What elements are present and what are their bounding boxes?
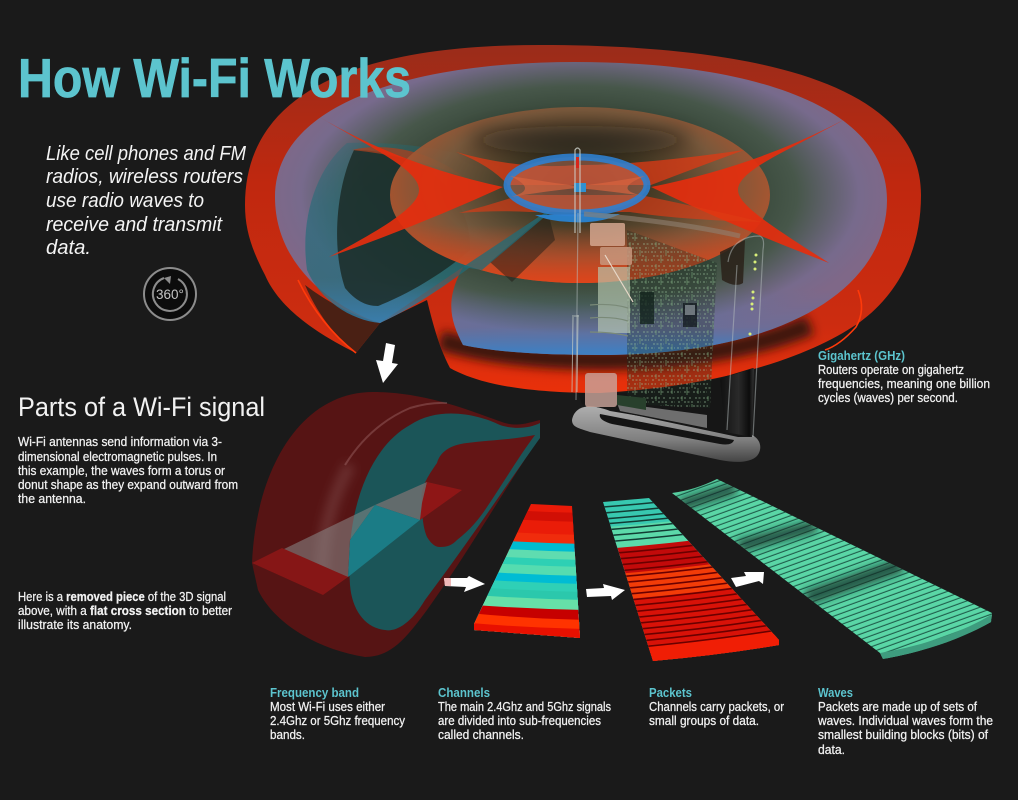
text: antennas description: donut shape as they expand outward from [18,478,238,492]
piece inner red hole [422,435,535,547]
red arc above hollow [352,147,465,178]
intro text: Like cell phones and FM [46,143,246,165]
band: frequency band [474,504,580,638]
inner bow tie [510,176,645,197]
piece inner glow [322,465,350,575]
chip two label [685,305,695,315]
arrow: packets to waves [731,572,764,587]
removed piece of signal [252,392,540,657]
text: removed piece description [18,590,232,632]
middle purple-blue shell [275,62,887,355]
main antenna [575,148,580,233]
piece teal cross section [349,413,540,630]
chip two [683,303,697,327]
section heading: Parts of a Wi-Fi signal [18,392,265,422]
status LEDs [748,254,758,336]
chip one [640,292,654,324]
teal cross-section of cut [305,143,552,323]
module contour lines [590,304,628,336]
antenna tip [576,157,579,168]
grey inner band [617,403,707,428]
caption: packets: Channels carry packets, or [649,700,784,714]
caption: waves: Packets are made up of sets of [818,700,977,714]
lower board chip [617,395,646,410]
text: antennas description: dimensional electromagnetic pulses. In [18,450,217,464]
arrow: piece to channel band [444,576,485,592]
piece outer body [252,392,540,657]
flat section upper grey [375,482,427,520]
caption: gigahertz: Gigahertz (GHz) [818,349,905,363]
highlight arc [345,403,447,465]
caption: packets: small groups of data. [649,714,759,728]
flat section red [420,482,462,520]
router base [572,406,760,462]
caption: channels: Channels [438,686,490,700]
caption: waves: Waves [818,686,853,700]
intro text: radios, wireless routers [46,166,243,188]
caption: gigahertz: Routers operate on gigahertz [818,363,964,377]
caption: waves: waves. Individual waves form the [817,714,993,728]
text: antennas description: Wi-Fi antennas send information via 3- [18,435,222,449]
title: How Wi-Fi Works [18,47,411,109]
lower wall shadow [440,325,810,360]
icon: 360 rotate: 360° [156,287,184,302]
outer red shell [245,45,921,393]
dark hollow of cut [337,150,470,306]
circuit board [627,230,717,408]
caption: frequency band [270,686,406,742]
caption: channels: The main 2.4Ghz and 5Ghz signals [438,700,611,714]
blue lower glow [452,300,816,355]
right side panel [720,368,754,437]
caption: channels [438,686,611,742]
arrow: channels to packets [586,584,625,600]
lower inner band [459,195,762,222]
pale module [598,267,630,333]
intro text: use radio waves to [46,190,204,212]
intro text: data. [46,237,91,259]
caption: frequency band: bands. [270,728,305,742]
caption: channels: are divided into sub-frequencies [438,714,601,728]
band: channel with packets [603,498,779,661]
blue inner ring [507,157,647,213]
flat section teal [348,505,420,577]
connector top [590,223,625,246]
red left horn [316,115,503,257]
center blue core [574,183,586,192]
lower case body [578,368,753,437]
bright rim left [298,280,356,353]
caption: waves: data. [818,743,845,757]
flat section grey [282,505,375,577]
lower connector [585,373,617,407]
caption: frequency band: 2.4Ghz or 5Ghz frequency [270,714,406,728]
arrow: down to removed piece [376,343,398,383]
upper inner band [456,150,744,185]
3D Wi-Fi signal torus [245,45,921,393]
cut piece dark edge [305,285,380,353]
text: antennas description: this example, the waves form a torus or [18,464,225,478]
caption: channels: called channels. [438,728,524,742]
intro text: receive and transmit [46,214,223,236]
caption: frequency band: Most Wi-Fi uses either [270,700,385,714]
icon: 360 rotate [144,268,196,320]
caption: packets: Packets [649,686,692,700]
caption: gigahertz: cycles (waves) per second. [818,391,958,405]
text: removed piece description: Here is a removed piece of the 3D signal [18,590,226,604]
red right horn [651,118,847,263]
band: waves [672,479,992,659]
inner top shadow [470,126,690,154]
caption: waves: smallest building blocks (bits) of [818,728,988,742]
second antenna [572,315,579,392]
router case outline [576,213,764,437]
diagonal cable [605,255,633,302]
intro text [46,143,246,259]
router [572,148,764,462]
inner orange lower glow [390,107,770,283]
caption: frequency band: Frequency band [270,686,359,700]
dark corner block [720,240,745,285]
caption: waves [817,686,993,757]
text: removed piece description: illustrate its anatomy. [18,618,132,632]
text: antennas description: the antenna. [18,492,86,506]
inner orange torus [390,107,770,283]
bright rim right [825,290,862,350]
base slot [600,414,734,444]
dark wedge [490,212,555,282]
blue lower sliver [535,214,620,222]
caption: gigahertz: frequencies, meaning one billion [818,377,990,391]
text: antennas description [18,435,238,506]
router top rim [584,214,740,236]
caption: gigahertz [818,349,990,405]
text: removed piece description: above, with a flat cross section to better [18,604,232,618]
connector second [600,247,632,265]
caption: packets [649,686,784,728]
teal strip [463,208,552,270]
front red strip [252,548,348,595]
